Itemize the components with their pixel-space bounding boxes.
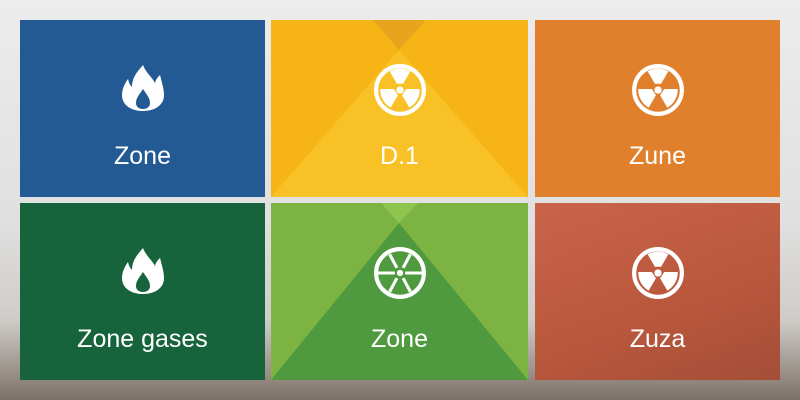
label: Zune xyxy=(629,142,686,170)
icon: radiation xyxy=(374,64,426,116)
icon: radiation xyxy=(632,247,684,299)
label: Zuza xyxy=(630,325,685,353)
label: D.1 xyxy=(380,142,419,170)
icon: wheel xyxy=(374,247,426,299)
tile: orange Zune xyxy=(535,20,780,197)
tile: dark green Zone gases xyxy=(20,203,265,380)
icon: fire xyxy=(122,248,164,294)
tile: blue fire Zone xyxy=(20,20,265,197)
tile: green Zone xyxy=(271,203,528,380)
label: Zone gases xyxy=(77,325,208,353)
label: Zone xyxy=(371,325,428,353)
tile: rust Zuza xyxy=(535,203,780,380)
tile: yellow D.1 xyxy=(271,20,528,197)
label: Zone xyxy=(114,142,171,170)
icon: fire xyxy=(122,65,164,111)
icon: radiation xyxy=(632,64,684,116)
